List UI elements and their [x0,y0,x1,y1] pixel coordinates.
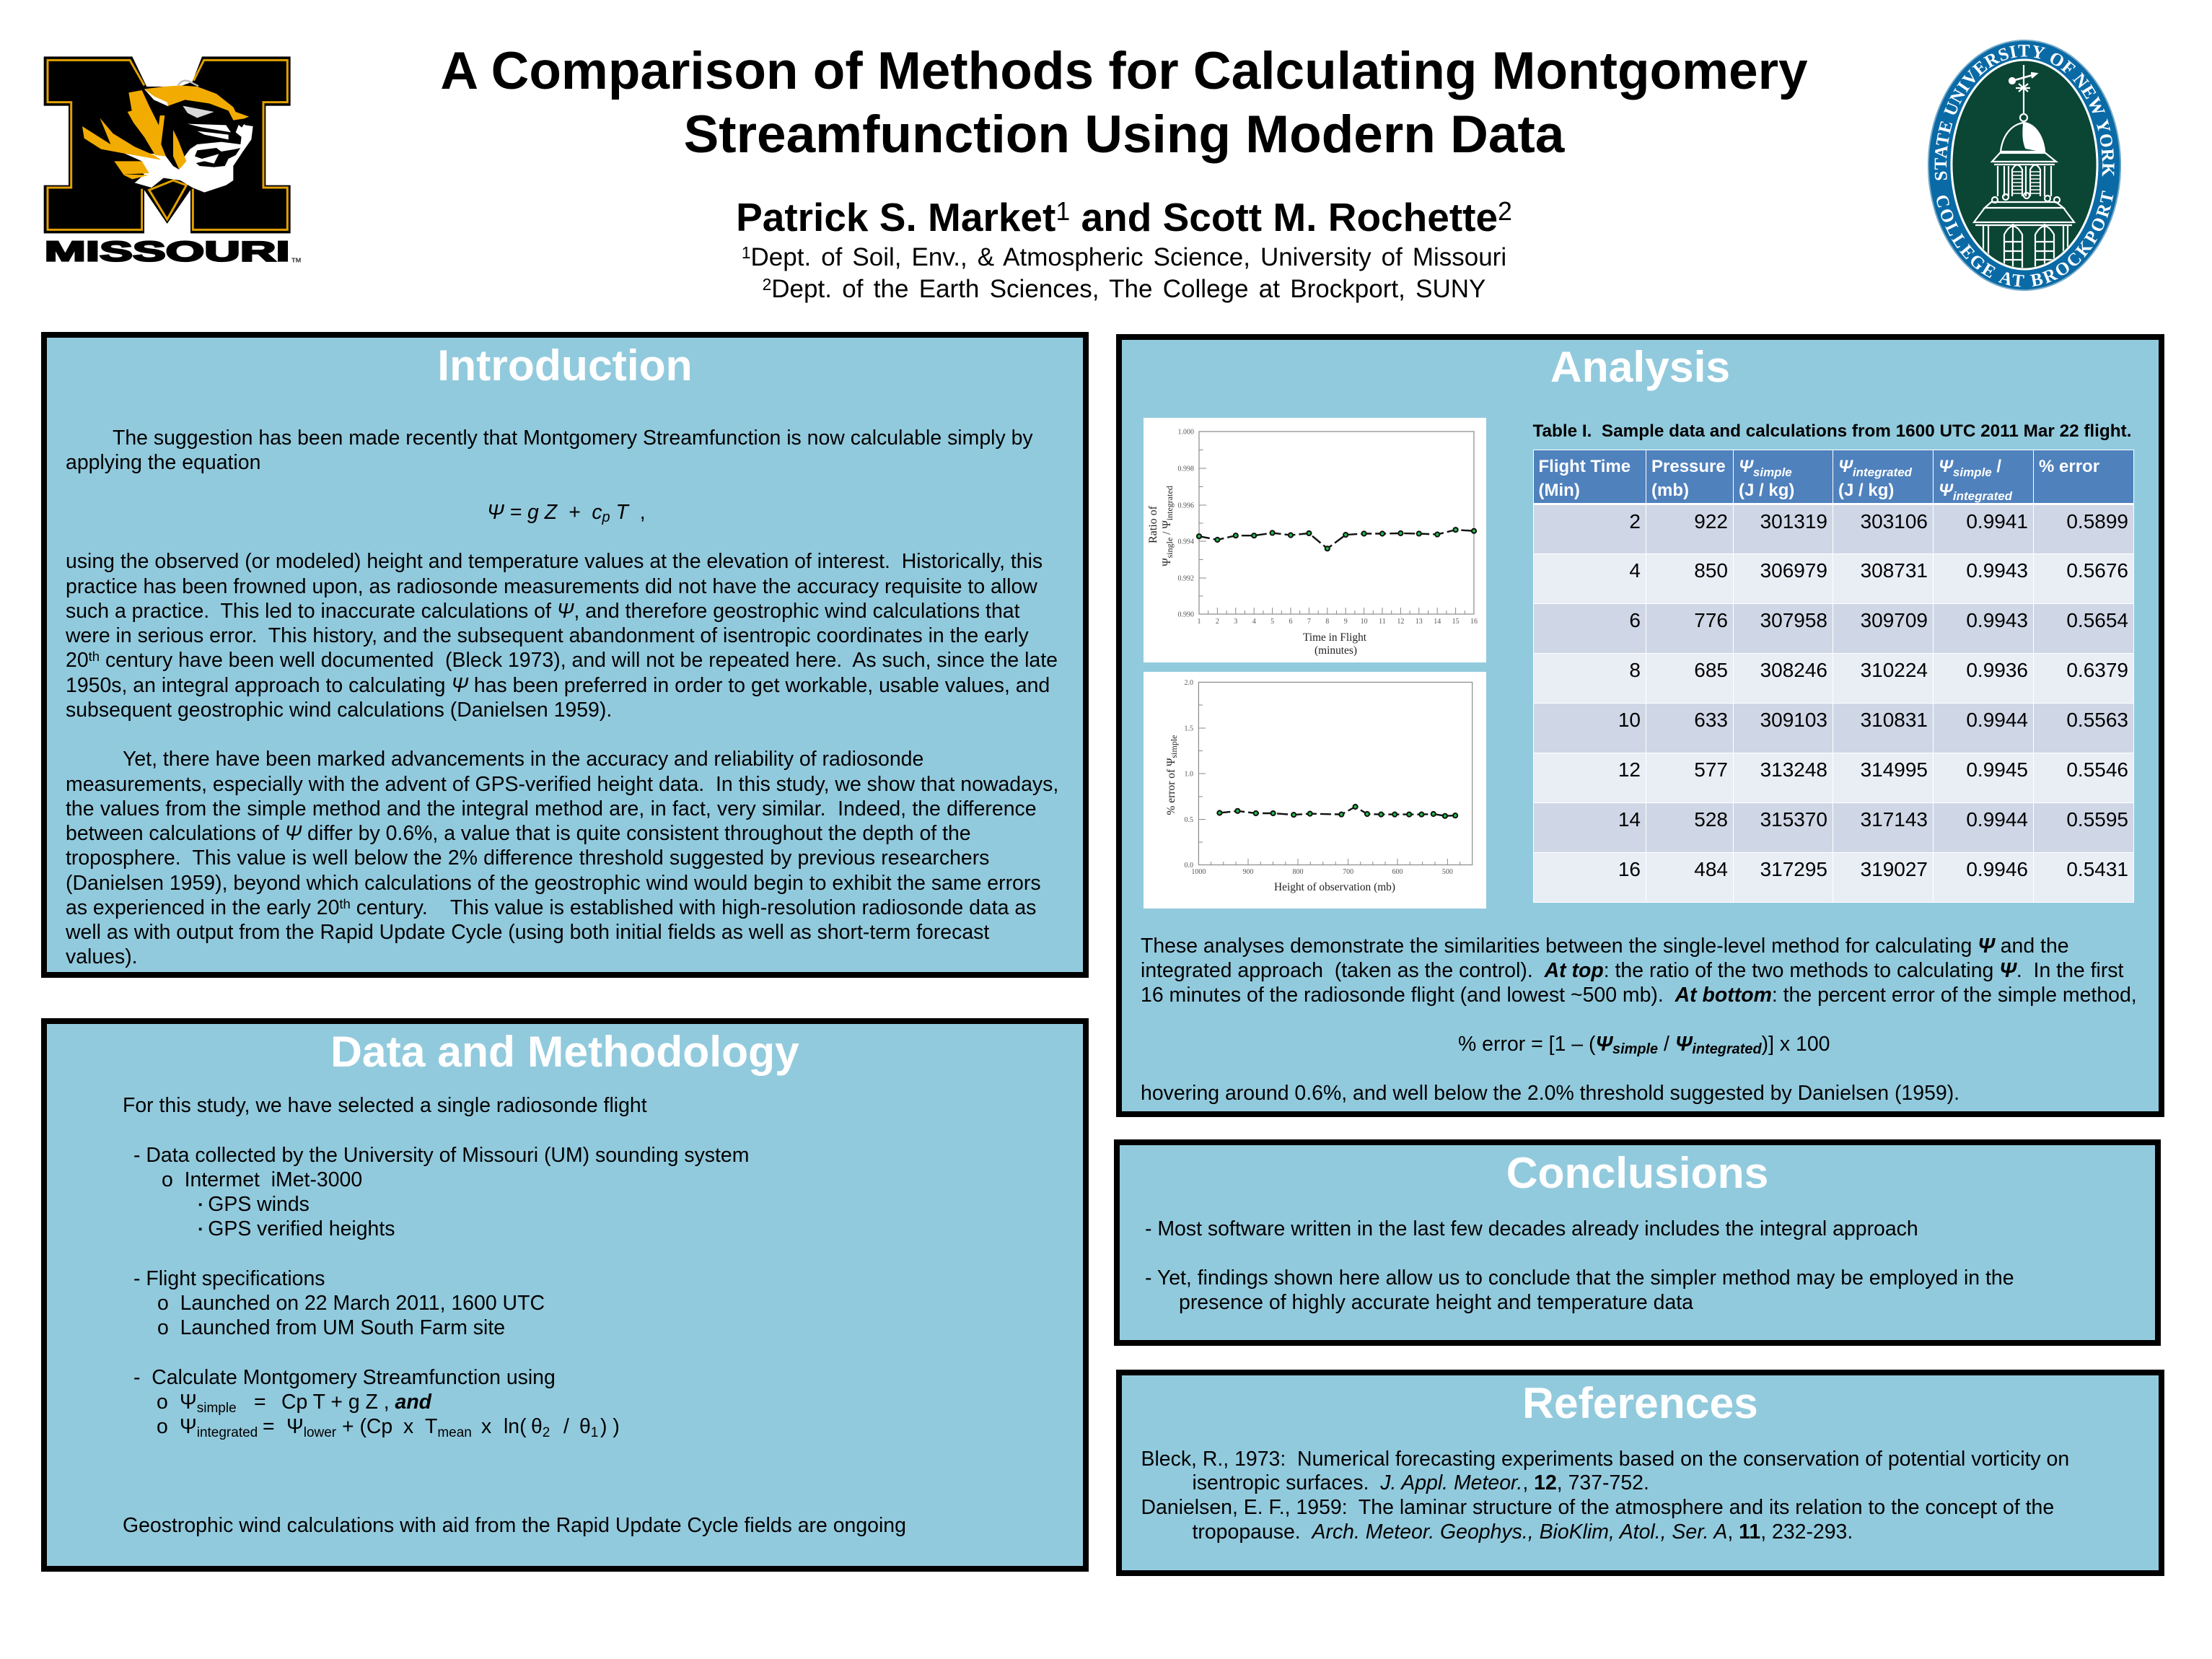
table: sample data and calculations: 301319 [1760,509,1827,533]
table: sample data and calculations: 0.9936 [1966,658,2028,681]
text block: analysis description: These analyses demonstrate the similarities between the single-level method for calculating Ψ and the [1141,934,2069,958]
chart: ratio of simple to integrated vs time in flight: 15 [1452,618,1460,626]
chart: ratio of simple to integrated vs time in flight: 5 [1270,618,1274,626]
table: sample data and calculations: % error [2039,457,2099,476]
table: sample data and calculations: 0.6379 [2066,658,2128,681]
chart: percent error of simple method vs height: 600 [1392,868,1403,876]
heading: References: References [1522,1378,1758,1427]
table: sample data and calculations: 0.9941 [1966,509,2028,533]
text block: methodology list: For this study, we have selected a single radiosonde flight [123,1094,647,1117]
chart: ratio of simple to integrated vs time in flight: 9 [1344,618,1348,626]
equation: simple method: Cp T + g Z , and [281,1391,431,1414]
table: sample data and calculations: (Min) [1538,481,1580,500]
chart: percent error of simple method vs height [1144,672,1486,909]
table: sample data and calculations [1533,450,2134,903]
table: sample data and calculations: 0.5546 [2066,758,2128,781]
text block: conclusions: - Yet, findings shown here allow us to conclude that the simpler method may be employed in the [1145,1266,2014,1290]
table caption: Table I. Sample data and calculations from 1600 UTC 2011 Mar 22 flight. [1532,421,2131,441]
chart: ratio of simple to integrated vs time in flight: 14 [1434,618,1441,626]
chart: ratio of simple to integrated vs time in flight: / Ψ [1161,520,1173,538]
text block: introduction body: practice has been frowned upon, as radiosonde measurements did not have the accuracy requisite to allow [66,574,1037,597]
chart: ratio of simple to integrated vs time in flight: 12 [1397,618,1404,626]
affiliations [742,243,1506,303]
chart: percent error of simple method vs height: 0.0 [1185,862,1193,870]
table: sample data and calculations: (mb) [1651,481,1689,500]
table: sample data and calculations: 0.9943 [1966,559,2028,582]
logo: University of Missouri tiger M: MISSOURI [45,236,290,268]
table: sample data and calculations: 10 [1618,709,1641,730]
equation: simple method: Ψsimple [180,1391,237,1416]
chart: percent error of simple method vs height: 1.0 [1185,771,1193,778]
text block: introduction body [66,426,1058,968]
panel: Analysis [1116,334,2164,1117]
table: sample data and calculations: 306979 [1760,559,1827,582]
text block: introduction body: between calculations of Ψ differ by 0.6%, a value that is quite consistent throughout the depth of the [66,822,971,845]
table: sample data and calculations: Ψintegrated [1838,457,1912,479]
chart: percent error of simple method vs height: simple [1169,735,1179,758]
table: sample data and calculations: 0.5431 [2066,857,2128,880]
chart: ratio of simple to integrated vs time in flight: 4 [1252,618,1256,626]
title: Streamfunction Using Modern Data [684,105,1564,164]
table: sample data and calculations: 315370 [1760,808,1827,830]
table: sample data and calculations: 310224 [1861,658,1928,681]
text block: introduction body: such a practice. This led to inaccurate calculations of Ψ, and therefore geostrophic wind calculations that [66,600,1020,623]
logo: College at Brockport seal [1928,40,2121,291]
text block: analysis description: hovering around 0.6%, and well below the 2.0% threshold suggested by Danielsen (1959). [1141,1082,1959,1105]
table: sample data and calculations: 0.9944 [1966,709,2028,730]
table: sample data and calculations: 310831 [1861,709,1928,730]
text block: introduction body: were in serious error. This history, and the subsequent abandonment of isentropic coordinates in the early [66,624,1029,647]
table: sample data and calculations: 317143 [1861,808,1928,830]
text block: methodology list: ▪ GPS verified heights [198,1217,395,1240]
equation: integrated method: Ψintegrated [180,1415,258,1440]
text block: introduction body: troposphere. This value is well below the 2% difference threshold suggested by previous researchers [66,846,989,870]
chart: percent error of simple method vs height: % error of Ψ [1165,758,1177,815]
text block: introduction body: as experienced in the early 20th century. This value is established with high-resolution radiosonde data as [66,896,1036,919]
table: sample data and calculations: 528 [1694,808,1728,830]
panel: Introduction [41,332,1089,978]
chart: percent error of simple method vs height: 1.5 [1185,725,1193,733]
chart: ratio of simple to integrated vs time in flight: 16 [1470,618,1478,626]
text block: methodology list: - Data collected by the University of Missouri (UM) sounding system [133,1143,749,1166]
text block: methodology list: ▪ GPS winds [198,1193,310,1216]
text block: conclusions [1145,1217,2014,1314]
chart: ratio of simple to integrated vs time in flight: 0.990 [1177,610,1194,619]
text block: methodology list: o Intermet iMet-3000 [162,1168,362,1191]
panel: Conclusions [1114,1139,2161,1346]
chart: ratio of simple to integrated vs time in flight: 0.996 [1177,502,1194,509]
chart: ratio of simple to integrated vs time in flight: integrated [1164,486,1175,520]
text block: introduction body: 1950s, an integral approach to calculating Ψ has been preferred in order to get workable, usable values, and [66,674,1050,697]
text block: introduction body: Ψ = g Z + cp T , [487,501,646,525]
equation: integrated method: / [563,1415,569,1438]
chart: ratio of simple to integrated vs time in flight: 7 [1307,618,1311,626]
chart: ratio of simple to integrated vs time in flight: 1 [1198,618,1201,626]
text block: introduction body: 20th century have been well documented (Bleck 1973), and will not be repeated here. As such, since the late [66,649,1058,672]
chart: ratio of simple to integrated vs time in flight: Time in Flight [1303,631,1367,644]
chart: ratio of simple to integrated vs time in flight: 13 [1416,618,1423,626]
chart: ratio of simple to integrated vs time in flight: (minutes) [1315,644,1357,657]
chart: ratio of simple to integrated vs time in flight: 0.998 [1177,465,1194,473]
table: sample data and calculations: 303106 [1861,509,1928,533]
panel: Data and Methodology [41,1018,1089,1572]
chart: ratio of simple to integrated vs time in flight: 6 [1289,618,1293,626]
equation: integrated method: ) ) [600,1415,620,1438]
text block: conclusions: presence of highly accurate height and temperature data [1179,1291,1693,1314]
table: sample data and calculations: 309709 [1861,609,1928,631]
table: sample data and calculations: Ψsimple / [1939,457,2001,479]
table: sample data and calculations: 484 [1694,857,1728,880]
text block: methodology list: - Calculate Montgomery Streamfunction using [133,1366,556,1389]
heading: Data and Methodology: Data and Methodology [330,1027,799,1076]
table: sample data and calculations: 6 [1629,609,1641,631]
table: sample data and calculations: 0.5595 [2066,808,2128,830]
text block: analysis description: integrated approach (taken as the control). At top: the ratio of the two methods to calculating Ψ. In the first [1141,959,2123,982]
chart: ratio of simple to integrated vs time in flight: 0.994 [1177,538,1194,546]
chart: percent error of simple method vs height: 1000 [1191,868,1206,876]
chart: ratio of simple to integrated vs time in flight: 3 [1234,618,1237,626]
text block: introduction body: The suggestion has been made recently that Montgomery Streamfunction is now calculable simply by [113,426,1033,450]
chart: ratio of simple to integrated vs time in flight: 2 [1216,618,1219,626]
text block: introduction body: Yet, there have been marked advancements in the accuracy and reliability of radiosonde [123,748,923,771]
table: sample data and calculations: 313248 [1760,758,1827,781]
table: sample data and calculations: 633 [1694,709,1728,730]
authors: Patrick S. Market1 and Scott M. Rochette2 [736,195,1512,240]
chart: percent error of simple method vs height: 2.0 [1185,679,1193,687]
table: sample data and calculations: 0.5563 [2066,709,2128,730]
equation: integrated method: + (Cp [342,1415,392,1438]
chart: ratio of simple to integrated vs time in flight: Ψ [1161,558,1173,566]
title [440,42,1808,164]
table: sample data and calculations: 16 [1618,857,1641,880]
table: sample data and calculations: 317295 [1760,857,1827,880]
chart: percent error of simple method vs height: 800 [1293,868,1303,876]
text block: analysis description: 16 minutes of the radiosonde flight (and lowest ~500 mb). At bottom: the percent error of the simple method, [1141,984,2137,1007]
text block: methodology list [123,1094,906,1537]
table: sample data and calculations: 309103 [1760,709,1827,730]
equation: integrated method: o [157,1415,168,1438]
table: sample data and calculations: 850 [1694,559,1728,582]
text block: introduction body: (Danielsen 1959), beyond which calculations of the geostrophic wind would begin to exhibit the same errors [66,872,1041,895]
chart: percent error of simple method vs height: Height of observation (mb) [1274,881,1395,893]
affiliations: 2Dept. of the Earth Sciences, The College at Brockport, SUNY [763,274,1485,303]
table: sample data and calculations: 0.5676 [2066,559,2128,582]
text block: references: isentropic surfaces. J. Appl. Meteor., 12, 737-752. [1192,1471,1649,1494]
table: sample data and calculations: 319027 [1861,857,1928,880]
table: sample data and calculations: 0.9944 [1966,808,2028,830]
panel: References [1116,1370,2164,1576]
text block: methodology list: o Launched on 22 March 2011, 1600 UTC [157,1292,545,1315]
text block: analysis description: % error = [1 – (Ψsimple / Ψintegrated)] x 100 [1458,1033,1830,1057]
heading: Introduction: Introduction [437,341,693,390]
equation: integrated method: Ψlower [286,1415,336,1440]
table: sample data and calculations: (J / kg) [1838,481,1894,500]
chart: ratio of simple to integrated vs time in flight: 0.992 [1177,574,1194,583]
equation: integrated method [157,1415,620,1440]
table: sample data and calculations: 308246 [1760,658,1827,681]
table: sample data and calculations: (J / kg) [1739,481,1794,500]
table: sample data and calculations: 314995 [1861,758,1928,781]
text block: methodology list: Geostrophic wind calculations with aid from the Rapid Update Cycle fields are ongoing [123,1514,906,1537]
text block: introduction body: well as with output from the Rapid Update Cycle (using both initial fields as well as short-term forecast [66,921,989,944]
table: sample data and calculations: 12 [1618,758,1641,781]
equation: simple method: o [157,1391,168,1414]
table: sample data and calculations: 0.9946 [1966,857,2028,880]
text block: references: Danielsen, E. F., 1959: The laminar structure of the atmosphere and its relation to the concept of the [1141,1496,2054,1519]
table: sample data and calculations: 577 [1694,758,1728,781]
text block: introduction body: the values from the simple method and the integral method are, in fact, very similar. Indeed, the difference [66,797,1037,820]
table: sample data and calculations: 14 [1618,808,1641,830]
chart: ratio of simple to integrated vs time in flight: 10 [1361,618,1368,626]
table: sample data and calculations: Ψsimple [1739,457,1792,479]
table: sample data and calculations: 8 [1629,658,1641,681]
equation: simple method [157,1391,431,1416]
text block: introduction body: using the observed (or modeled) height and temperature values at the elevation of interest. Historically, this [66,550,1043,573]
text block: references: Bleck, R., 1973: Numerical forecasting experiments based on the conservation of potential vorticity on [1141,1448,2069,1471]
text block: introduction body: subsequent geostrophic wind calculations (Danielsen 1959). [66,699,612,722]
table: sample data and calculations: 0.5654 [2066,609,2128,631]
title: A Comparison of Methods for Calculating Montgomery [440,42,1808,100]
logo: University of Missouri tiger M: TM [291,256,301,263]
equation: integrated method: x [481,1415,491,1438]
equation: integrated method: θ1 [579,1415,598,1440]
logo: College at Brockport seal: STATE UNIVERSITY OF NEW YORK [1935,45,2115,180]
table: sample data and calculations: 922 [1694,509,1728,533]
text block: references: tropopause. Arch. Meteor. Geophys., BioKlim, Atol., Ser. A, 11, 232-293. [1192,1520,1853,1544]
chart: percent error of simple method vs height: 0.5 [1185,816,1193,824]
text block: methodology list: - Flight specifications [133,1267,325,1290]
equation: integrated method: Tmean [425,1415,472,1440]
text block: conclusions: - Most software written in the last few decades already includes the integral approach [1145,1217,1918,1240]
chart: ratio of simple to integrated vs time in flight: Ratio of [1147,505,1159,543]
logo: College at Brockport seal: COLLEGE AT BROCKPORT [1936,191,2114,287]
equation: integrated method: x [403,1415,413,1438]
equation: simple method: = [254,1391,266,1414]
chart: ratio of simple to integrated vs time in flight: 11 [1379,618,1386,626]
table: sample data and calculations: 0.9943 [1966,609,2028,631]
chart: percent error of simple method vs height: 700 [1343,868,1353,876]
table: sample data and calculations: 776 [1694,609,1728,631]
chart: percent error of simple method vs height: 900 [1242,868,1254,876]
table: sample data and calculations: Ψintegrated [1939,481,2012,503]
table: sample data and calculations: Pressure [1651,457,1726,476]
logo: University of Missouri tiger M [43,56,301,268]
affiliations: 1Dept. of Soil, Env., & Atmospheric Science, University of Missouri [742,243,1506,271]
chart: ratio of simple to integrated vs time in flight [1144,418,1486,662]
table: sample data and calculations: 0.9945 [1966,758,2028,781]
text block: introduction body: measurements, especially with the advent of GPS-verified height data. In this study, we show that nowadays, [66,772,1058,795]
text block: analysis description [1141,934,2137,1105]
chart: ratio of simple to integrated vs time in flight: 1.000 [1177,429,1194,436]
table: sample data and calculations: 685 [1694,658,1728,681]
heading: Analysis: Analysis [1550,342,1730,391]
table: sample data and calculations: 308731 [1861,559,1928,582]
chart: ratio of simple to integrated vs time in flight: single [1164,538,1175,558]
chart: percent error of simple method vs height: 500 [1442,868,1453,876]
table: sample data and calculations: 0.5899 [2066,509,2128,533]
equation: integrated method: ln( [504,1415,527,1438]
equation: integrated method: = [263,1415,275,1438]
text block: references [1141,1448,2069,1544]
table: sample data and calculations: 307958 [1760,609,1827,631]
text block: introduction body: applying the equation [66,451,260,474]
equation: integrated method: θ2 [531,1415,550,1440]
chart: ratio of simple to integrated vs time in flight: 8 [1325,618,1329,626]
text block: introduction body: values). [66,945,138,968]
table: sample data and calculations: 4 [1629,559,1641,582]
heading: Conclusions: Conclusions [1506,1148,1768,1197]
text block: methodology list: o Launched from UM South Farm site [157,1316,505,1339]
table: sample data and calculations: 2 [1629,509,1641,533]
table: sample data and calculations: Flight Time [1538,457,1631,476]
